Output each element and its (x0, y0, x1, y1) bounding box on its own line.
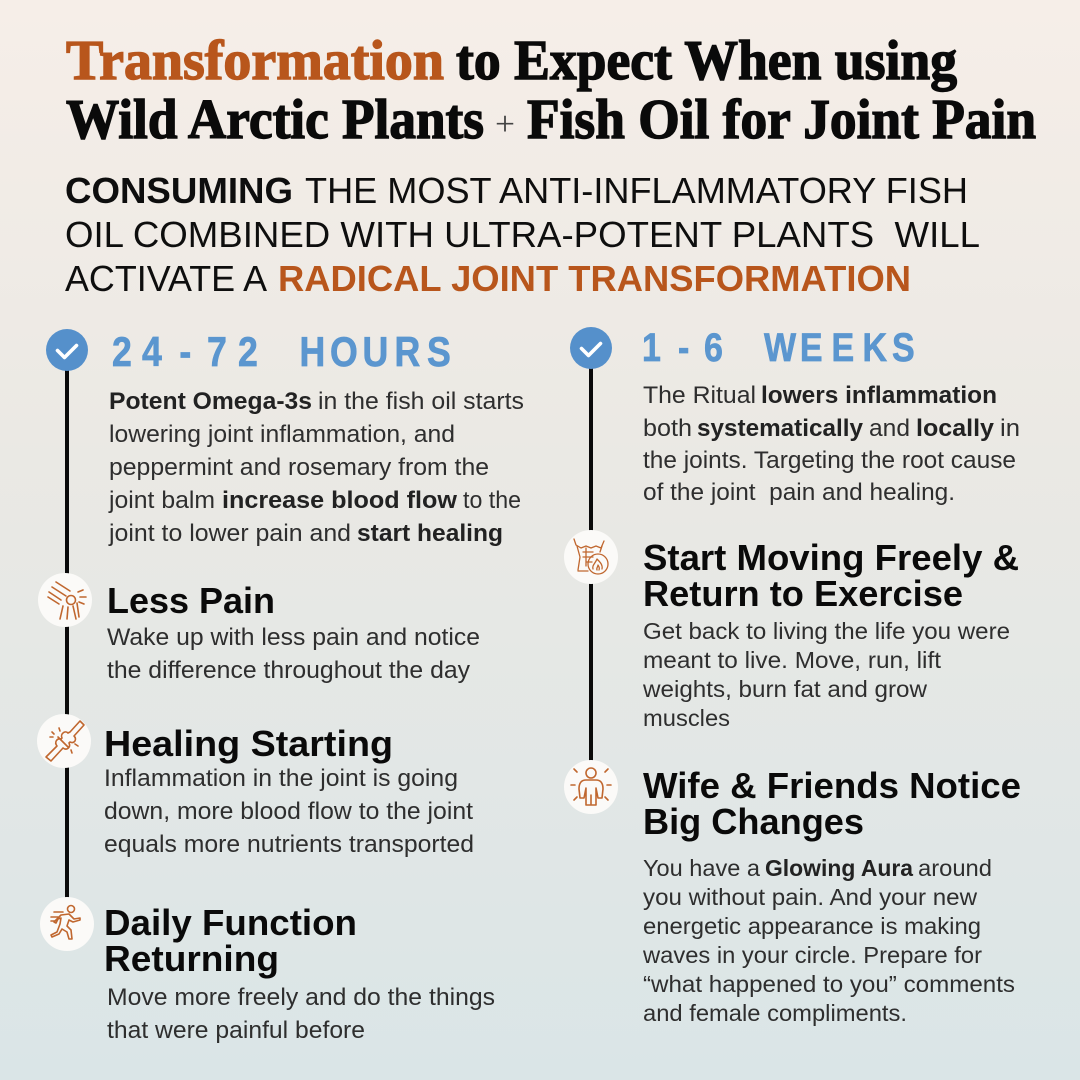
title: Fish Oil for Joint Pain (527, 89, 1036, 151)
text: 1-6 weeks description: the joints. Targeting the root cause (643, 447, 1016, 474)
text: daily function description (107, 984, 495, 1044)
text: wife and friends description: and female compliments. (643, 1000, 907, 1026)
text: 1-6 weeks description: lowers inflammation (761, 382, 997, 409)
title: Transformation (66, 30, 444, 92)
text: 1-6 weeks description: The Ritual (643, 382, 756, 409)
title: + (495, 106, 515, 143)
text: 24-72 hours description: joint balm (108, 487, 215, 514)
heading: wife and friends: Wife & Friends Notice (643, 765, 1021, 806)
text: healing starting description: equals more nutrients transported (104, 831, 474, 858)
heading: daily function returning: Daily Function (104, 902, 357, 943)
text: wife and friends description: energetic appearance is making (643, 913, 981, 939)
heading: 1-6 weeks (642, 324, 915, 370)
heading: healing starting: Healing Starting (104, 723, 393, 764)
text: 24-72 hours description: Potent Omega-3s (109, 388, 312, 415)
text: wife and friends description (642, 855, 1015, 1026)
icon: knee joint pain (38, 573, 92, 627)
heading: daily function returning: Returning (104, 938, 279, 979)
text: 24-72 hours description: in the fish oil starts (318, 388, 524, 415)
text: start moving description: meant to live. Move, run, lift (643, 647, 941, 673)
text: healing starting description (104, 765, 474, 858)
heading: wife and friends (643, 765, 1021, 842)
text: start moving description: Get back to living the life you were (643, 618, 1010, 644)
icon: check 24-72 hours (46, 329, 88, 371)
subtitle: THE MOST ANTI-INFLAMMATORY FISH (305, 170, 968, 211)
title: to Expect When using (456, 30, 957, 92)
icon: check 1-6 weeks (570, 327, 612, 369)
text: healing starting description: down, more blood flow to the joint (104, 798, 473, 825)
text: 1-6 weeks description: locally (916, 415, 994, 442)
text: less pain description: Wake up with less pain and notice (107, 624, 480, 651)
text: wife and friends description: You have a (643, 855, 761, 881)
text: 1-6 weeks description (643, 382, 1020, 506)
subtitle: RADICAL JOINT TRANSFORMATION (278, 258, 911, 299)
left timeline line (65, 350, 69, 925)
icon: healing joint (37, 714, 91, 768)
text: 1-6 weeks description: both (643, 415, 692, 442)
subtitle (65, 170, 980, 299)
right timeline line (589, 348, 593, 788)
subtitle: OIL COMBINED WITH ULTRA-POTENT PLANTS WILL (65, 214, 980, 255)
heading: 1-6 weeks: WEEKS (764, 324, 915, 370)
text: wife and friends description: “what happened to you” comments (643, 971, 1015, 997)
heading: start moving freely (643, 537, 1019, 614)
text: start moving description: muscles (643, 705, 730, 731)
text: 24-72 hours description: joint to lower pain and (108, 520, 351, 547)
text: wife and friends description: waves in your circle. Prepare for (642, 942, 982, 968)
text: daily function description: Move more freely and do the things (107, 984, 495, 1011)
text: 24-72 hours description: peppermint and rosemary from the (109, 454, 489, 481)
heading: 24-72 hours: 24-72 (112, 329, 258, 376)
heading: wife and friends: Big Changes (643, 801, 864, 842)
heading: 24-72 hours: HOURS (300, 329, 451, 376)
icon: torso with flame (564, 530, 618, 584)
text: 1-6 weeks description: in (1000, 415, 1020, 442)
text: 24-72 hours description: start healing (357, 520, 503, 547)
text: 24-72 hours description (108, 388, 524, 547)
title: Wild Arctic Plants (66, 89, 484, 151)
text: wife and friends description: around (918, 855, 992, 881)
subtitle: CONSUMING (65, 170, 293, 211)
text: 24-72 hours description: increase blood flow (222, 487, 458, 514)
icon: running person (40, 897, 94, 951)
text: start moving description: weights, burn fat and grow (642, 676, 928, 702)
heading: start moving freely: Start Moving Freely & (643, 537, 1019, 578)
text: daily function description: that were painful before (107, 1017, 365, 1044)
title (66, 30, 1036, 151)
text: less pain description: the difference throughout the day (107, 657, 471, 684)
heading: less pain: Less Pain (107, 580, 275, 621)
text: 24-72 hours description: to the (463, 487, 521, 514)
icon: glowing person (564, 760, 618, 814)
text: less pain description (107, 624, 480, 684)
heading: daily function returning (104, 902, 357, 979)
text: wife and friends description: Glowing Aura (765, 855, 914, 881)
heading: start moving freely: Return to Exercise (643, 573, 963, 614)
text: 24-72 hours description: lowering joint inflammation, and (109, 421, 455, 448)
text: wife and friends description: you without pain. And your new (643, 884, 978, 910)
text: start moving description (642, 618, 1010, 731)
heading: 24-72 hours (112, 329, 451, 376)
subtitle: ACTIVATE A (65, 258, 267, 299)
text: 1-6 weeks description: and (869, 415, 910, 442)
heading: 1-6 weeks: 1-6 (642, 324, 723, 370)
text: healing starting description: Inflammation in the joint is going (104, 765, 458, 792)
text: 1-6 weeks description: systematically (697, 415, 863, 442)
text: 1-6 weeks description: of the joint pain and healing. (643, 479, 955, 506)
